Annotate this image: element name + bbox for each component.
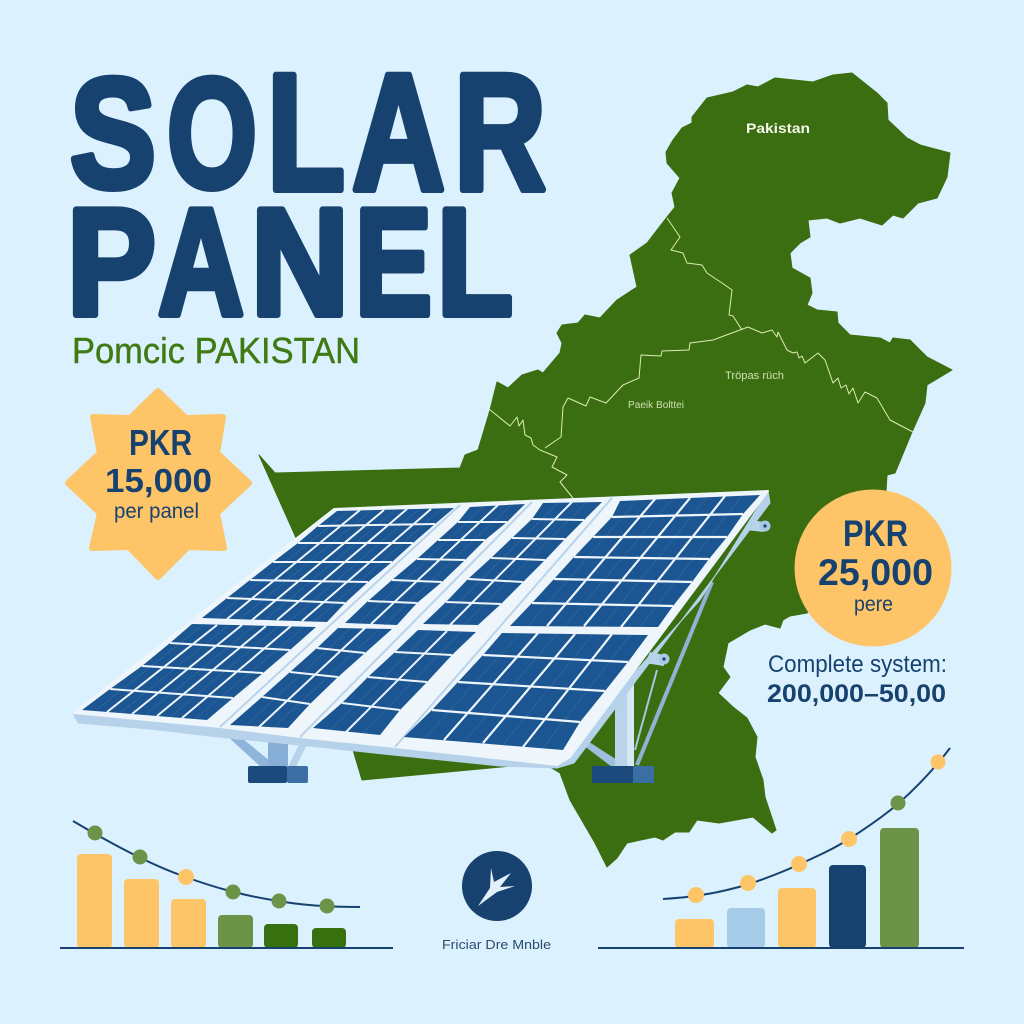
price badge: star: PKR (129, 422, 192, 463)
title: SOLAR PANEL: E (355, 178, 432, 348)
price badge: circle (794, 490, 952, 646)
title: SOLAR PANEL: N (251, 178, 349, 348)
chart: falling prices (60, 821, 393, 948)
map label: Pakistan: Pakistan (746, 120, 810, 136)
subtitle: Pomcic PAKISTAN (72, 330, 360, 371)
frame side (73, 491, 770, 768)
price badge: circle: pere (854, 593, 893, 616)
logo caption: Friciar Dre Mnble (442, 937, 551, 952)
panel module 3 (313, 502, 602, 735)
chart: rising savings (598, 748, 964, 948)
province borders (489, 218, 913, 498)
price badge: circle: 25,000 (818, 552, 933, 593)
map label: region west: Paeik Bolttei (628, 400, 684, 411)
title: SOLAR PANEL: L (437, 178, 513, 348)
right stand (579, 520, 770, 783)
solar panel array (73, 491, 770, 783)
price badge: circle: PKR (843, 513, 908, 554)
title: SOLAR PANEL: L (267, 40, 345, 226)
complete system text: Complete system: (768, 651, 947, 678)
panel module 1 (82, 508, 454, 720)
title: SOLAR PANEL: O (167, 47, 257, 221)
title: SOLAR PANEL: P (67, 178, 156, 348)
left stand (226, 735, 310, 783)
panel module 2 (230, 504, 525, 728)
map: Pakistan (259, 73, 952, 867)
title: SOLAR PANEL: A (352, 40, 445, 226)
title: SOLAR PANEL (67, 40, 546, 348)
price badge: star (68, 391, 249, 577)
price badge: star: per panel (114, 500, 199, 523)
title: SOLAR PANEL: S (70, 47, 156, 221)
title: SOLAR PANEL: R (454, 40, 546, 226)
complete system text: 200,000–50,00 (767, 680, 946, 708)
complete system text (767, 651, 947, 708)
price badge: star: 15,000 (105, 462, 212, 499)
frames (74, 491, 768, 765)
logo icon (462, 851, 532, 921)
map label: region east: Tröpas rüch (725, 370, 784, 382)
panel module 4 (404, 495, 760, 750)
title: SOLAR PANEL: A (158, 178, 244, 348)
